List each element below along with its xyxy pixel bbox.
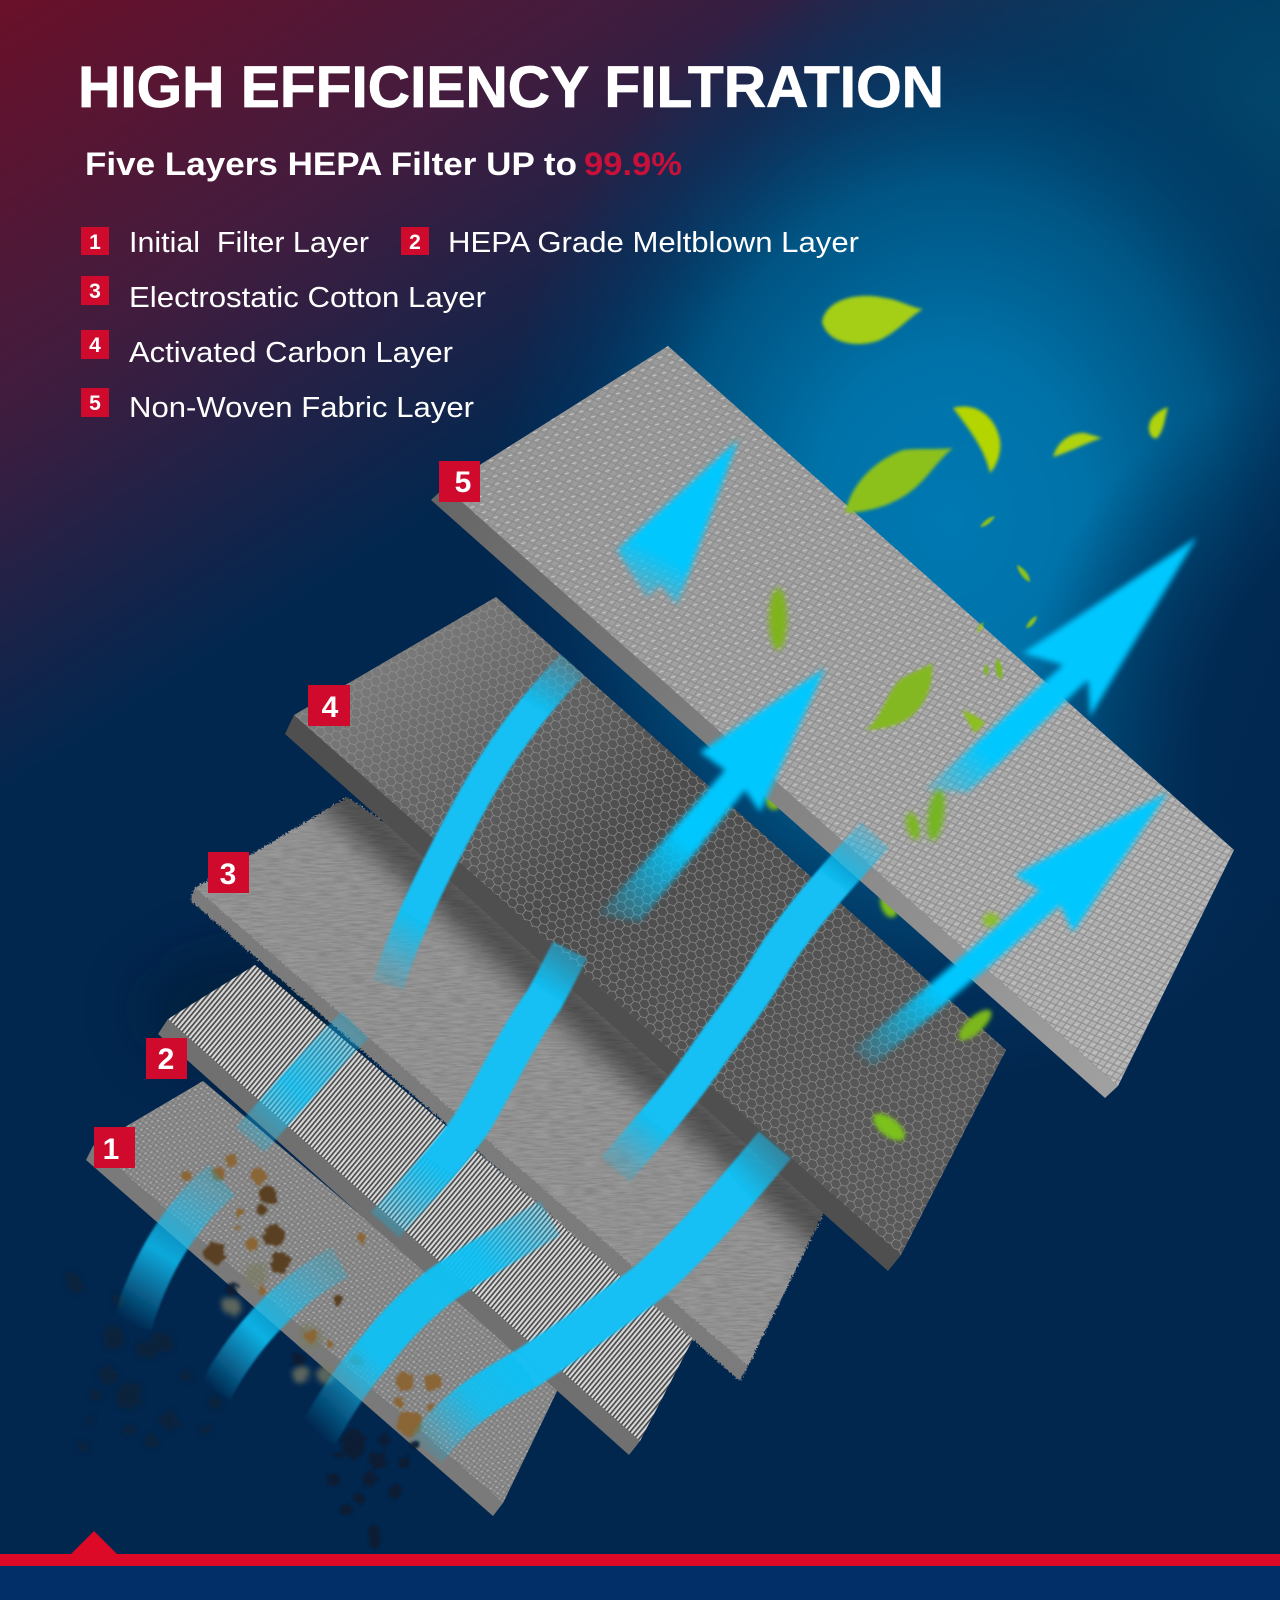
badge: layer 1: 1 <box>103 1133 119 1166</box>
leaves behind the top plate <box>765 784 996 1146</box>
ribbon: through layer 2 <box>250 1025 355 1140</box>
legend item 3 <box>81 276 486 314</box>
layer 5: non-woven fabric plate <box>431 346 1234 1098</box>
layer 3: electrostatic cotton plate <box>190 797 832 1381</box>
ribbon: through layer 4 left <box>388 665 572 985</box>
legend item 5: 5 <box>89 392 101 415</box>
badge: layer 3: 3 <box>220 858 236 891</box>
gray dust <box>221 1263 334 1384</box>
legend item 2: 2 <box>409 231 421 254</box>
ribbon: through layer 4 middle <box>615 835 875 1170</box>
legend item 4: 4 <box>89 334 101 357</box>
layer 1: initial filter plate <box>86 1081 558 1516</box>
subtitle: 99.9% <box>584 146 682 182</box>
legend item 5: Non-Woven Fabric Layer <box>129 392 474 424</box>
layer 4: activated carbon plate <box>285 597 1006 1271</box>
bottom band <box>0 1531 1280 1600</box>
ribbon: second lower <box>318 1218 550 1435</box>
badge: layer 1 <box>94 1127 135 1168</box>
badge: layer 5 <box>439 461 480 502</box>
arrow: mid head on layer 4 <box>598 668 825 922</box>
arrow: lower right head <box>853 792 1168 1066</box>
legend list <box>81 227 859 424</box>
legend item 3: 3 <box>89 280 101 303</box>
subtitle: Five Layers HEPA Filter UP to <box>85 146 577 182</box>
dust and dirt particles <box>62 1154 442 1548</box>
legend item 1: 1 <box>89 231 101 254</box>
soft shadow behind layers <box>140 950 360 1070</box>
ribbon: third lower <box>215 1262 340 1392</box>
airflow ribbon arrows <box>132 665 875 1450</box>
badge: layer 4: 4 <box>322 691 339 724</box>
dark dust on background <box>62 1268 221 1453</box>
green leaves <box>769 296 1168 927</box>
legend item 2: HEPA Grade Meltblown Layer <box>448 227 859 259</box>
badge: layer 4 <box>308 685 350 726</box>
badge: layer 2 <box>146 1038 187 1079</box>
title: HIGH EFFICIENCY FILTRATION <box>78 55 944 120</box>
ribbon: lower long <box>425 1145 775 1450</box>
legend item 1: Initial Filter Layer <box>129 227 369 259</box>
legend item 4 <box>81 330 453 369</box>
legend item 4: Activated Carbon Layer <box>129 337 453 369</box>
ribbon: middle through layer 3 <box>385 950 570 1225</box>
badge: layer 5: 5 <box>455 466 471 499</box>
badge: layer 2: 2 <box>158 1043 174 1076</box>
brown dirt <box>182 1154 442 1437</box>
ribbon: far left <box>132 1180 222 1325</box>
arrow: upper right head <box>924 537 1197 792</box>
legend item 3: Electrostatic Cotton Layer <box>129 282 486 314</box>
badge: layer 3 <box>208 852 249 893</box>
arrow: blurred head on layer 5 <box>617 440 738 605</box>
layer 2: HEPA meltblown plate <box>158 965 692 1455</box>
